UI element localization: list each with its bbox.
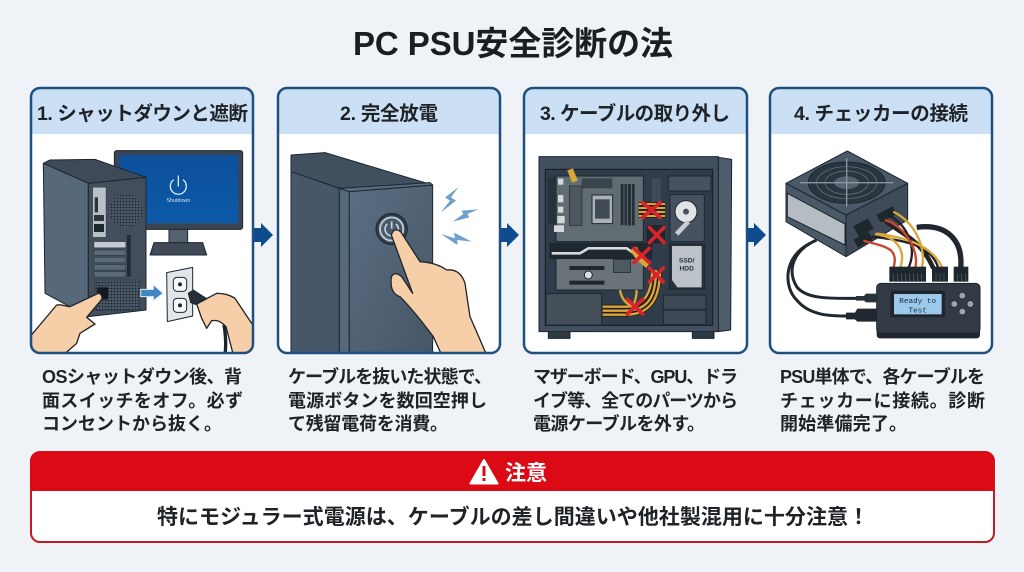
text: step 3 description: 電源ケーブルを外す。 [533,413,705,434]
tester cables [788,240,860,316]
header: step 3: 3. ケーブルの取り外し [540,102,730,125]
frame: step 4 [770,88,992,353]
text: step 2 description: て残留電荷を消費。 [288,413,448,434]
caution message: 特にモジュラー式電源は、ケーブルの差し間違いや他社製混用に十分注意！ [157,505,869,529]
caution heading: 注意 [505,462,547,485]
header: step 4 [769,87,993,134]
motherboard [548,169,643,242]
header: step 1 [30,87,254,134]
connectors [889,267,968,282]
header: step 4: 4. チェッカーの接続 [794,103,968,125]
tester device: Ready to [899,298,936,306]
monitor [114,151,243,255]
illustration: PC tower, monitor and outlet [30,151,255,355]
cables [603,204,665,315]
SSD: SSD/ [679,258,695,265]
text: step 3 description: マザーボード、GPU、ドラ [533,367,738,387]
text: step 2 description: ケーブルを抜いた状態で、 [288,366,492,387]
text: step 2 description [288,366,492,434]
frame: step 3 [524,88,747,353]
illustration: PSU and tester [786,151,980,338]
arrow: step 1 to 2 [254,223,273,247]
frame: step 1 [31,88,253,353]
panel: step 3 remove cables [523,87,748,354]
header: step 2 [277,87,501,134]
SSD: HDD [679,266,694,273]
sparks [441,187,478,245]
callout: caution [30,452,994,542]
text: step 1 description [42,366,243,434]
power supply [546,293,602,325]
monitor: Shutdown [166,198,190,204]
tester device [846,283,980,338]
drive cage [652,176,711,325]
PC tower [43,159,146,317]
arrow: to outlet [141,285,163,301]
hard disk [670,194,704,242]
text: step 4 description [780,366,985,434]
header: step 3 [523,87,748,134]
PSU box [786,151,908,257]
text: step 4 description: PSU単体で、各ケーブルを [780,366,985,387]
text: step 1 description: 面スイッチをオフ。必ず [42,391,243,411]
panel: step 4 connect checker [769,87,993,354]
PC case [291,153,433,355]
text: step 1 description: コンセントから抜く。 [42,414,222,434]
plug and cable [188,290,226,355]
illustration: open PC case [539,157,732,338]
header: step 2: 2. 完全放電 [340,103,438,125]
frame: step 2 [278,88,500,353]
text: step 4 description: チェッカーに接続。診断 [780,390,985,411]
hand right [197,293,255,355]
caution header bar [30,452,994,491]
wall outlet [167,267,193,322]
panel: step 2 full discharge [277,87,501,355]
text: step 2 description: 電源ボタンを数回空押し [288,391,487,411]
case [539,157,732,338]
hand left [30,293,102,355]
tester device: Test [908,307,927,315]
arrow: step 3 to 4 [748,223,766,247]
text: step 1 description: OSシャットダウン後、背 [42,366,242,387]
SSD [669,244,705,289]
text: step 4 description: 開始準備完了。 [780,413,907,434]
red X marks [627,203,664,314]
graphics card [550,243,652,259]
lower board [556,259,643,290]
icon: warning triangle [470,460,498,484]
hand [391,230,487,355]
panel: step 1 shutdown and disconnect [30,87,255,355]
text: step 3 description: イブ等、全てのパーツから [533,390,738,411]
arrow: step 2 to 3 [501,223,519,247]
text: step 3 description [533,367,738,434]
illustration: pressing power button [291,153,487,355]
power cables [863,212,961,268]
power button [376,213,407,245]
header: step 1: 1. シャットダウンと遮断 [37,102,248,125]
title: PC PSU安全診断の法 [353,25,673,62]
